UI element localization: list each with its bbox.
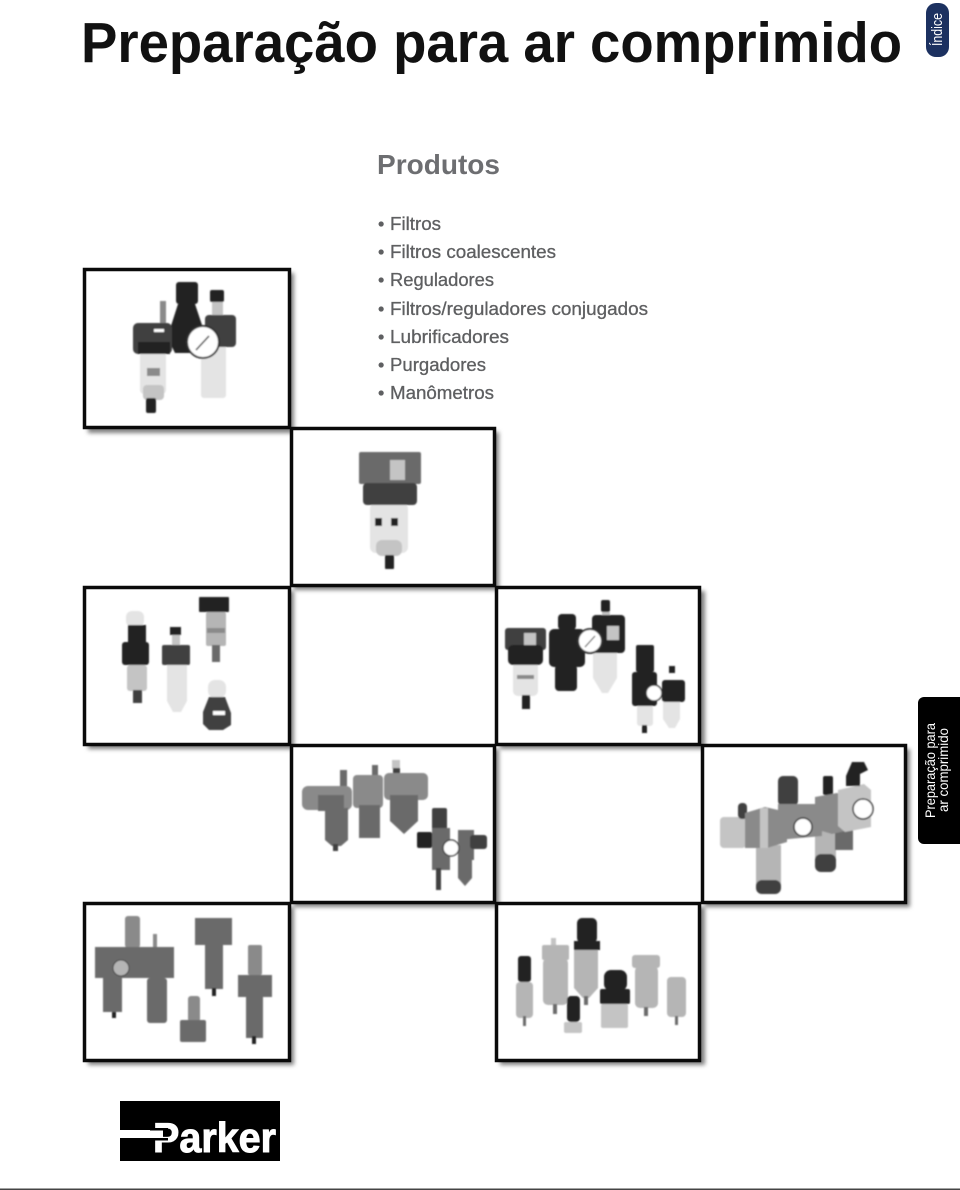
product list: Purgadores — [390, 355, 486, 375]
section heading: Produtos: Produtos — [377, 149, 500, 180]
product list: • — [378, 270, 384, 290]
index tab: Índice — [929, 13, 946, 46]
product photo: compact units — [122, 597, 231, 730]
product photo: grey FRL sets — [302, 760, 487, 890]
product photo: filter — [359, 452, 421, 569]
panel: grey aluminium units — [292, 746, 494, 902]
title: Preparação para ar comprimido — [81, 11, 902, 75]
product photo: FRL sets — [505, 600, 685, 733]
frame shadows — [88, 273, 910, 1065]
panel: filter regulator lubricator sets — [496, 588, 700, 744]
panel: stainless steel units — [496, 904, 700, 1060]
panel: compact filters and regulators — [84, 588, 290, 744]
product list: • — [378, 383, 384, 403]
panel: single filter — [292, 428, 494, 586]
product list: • — [378, 327, 384, 347]
panel: modular FRL assembly — [702, 746, 906, 902]
product photo: stainless units — [516, 918, 686, 1033]
product list: • — [378, 242, 384, 262]
product list: Filtros coalescentes — [390, 242, 556, 262]
index tab — [926, 3, 949, 57]
panel: heavy duty grey units — [84, 904, 290, 1060]
product list: Filtros — [390, 214, 441, 234]
panel: combined filter, regulator and lubricator unit — [84, 270, 290, 428]
product list — [378, 214, 648, 403]
product list: Lubrificadores — [390, 327, 509, 347]
product list: Reguladores — [390, 270, 494, 290]
logo: Parker: Parker — [153, 1114, 276, 1161]
side tab: Preparação para ar comprimido: ar comprimido — [936, 728, 951, 812]
side tab: Preparação para ar comprimido: Preparação para — [923, 723, 938, 818]
product list: • — [378, 299, 384, 319]
product photo: heavy duty units — [95, 916, 272, 1044]
product list: • — [378, 214, 384, 234]
side tab: Preparação para ar comprimido — [918, 697, 960, 844]
product photo: FRL set — [133, 282, 236, 413]
product list: Manômetros — [390, 383, 494, 403]
logo: Parker — [120, 1101, 280, 1161]
product photo: modular assembly — [720, 762, 873, 894]
product list: • — [378, 355, 384, 375]
product list: Filtros/reguladores conjugados — [390, 299, 648, 319]
